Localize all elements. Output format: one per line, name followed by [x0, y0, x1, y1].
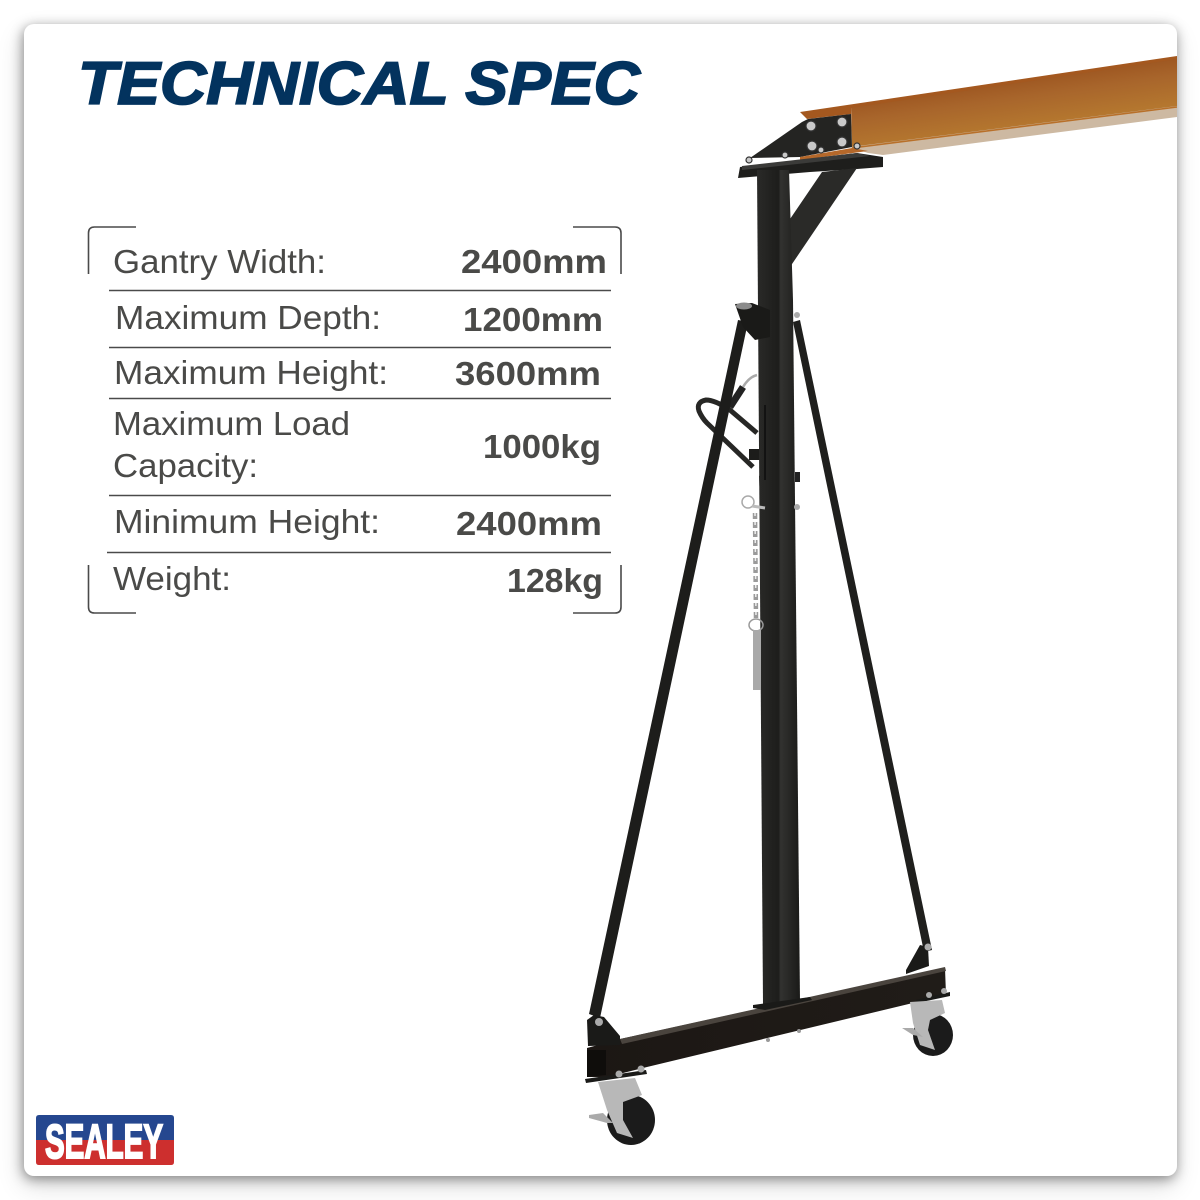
row: maximum height: [114, 354, 601, 392]
left leg with pivot bracket: [589, 302, 800, 1018]
row: weight: Weight:: [113, 560, 231, 597]
row: maximum load capacity: Capacity:: [113, 447, 258, 484]
row: maximum height: Maximum Height:: [114, 354, 388, 391]
logo red band: [36, 1140, 174, 1165]
row: gantry width: 2400mm: [461, 243, 607, 280]
left caster: [585, 1066, 655, 1145]
row: maximum height: 3600mm: [455, 355, 601, 392]
row: maximum depth: 1200mm: [463, 301, 603, 338]
main column: [757, 170, 800, 1004]
row: minimum height: [114, 503, 602, 542]
row: maximum load capacity: Maximum Load: [113, 405, 350, 442]
lock pin and chain: [742, 496, 765, 690]
handle and hydraulic lever: [696, 374, 760, 486]
mounting plate: [738, 114, 883, 178]
row: weight: 128kg: [507, 562, 603, 599]
title: TECHNICAL SPEC: [78, 50, 642, 117]
row: maximum load capacity: [113, 405, 601, 484]
row: minimum height: Minimum Height:: [114, 503, 380, 540]
column slot: [764, 405, 766, 480]
row: gantry width: [113, 243, 607, 280]
diagonal brace: [790, 168, 856, 264]
logo blue band: [36, 1115, 174, 1140]
base gussets: [587, 944, 932, 1046]
i-beam: [800, 56, 1177, 155]
base beam: [587, 967, 946, 1077]
row: minimum height: 2400mm: [456, 505, 602, 542]
row: maximum depth: Maximum Depth:: [115, 299, 381, 336]
logo wordmark: SEALEY: [45, 1116, 163, 1169]
right leg: [793, 320, 932, 952]
gantry crane illustration: [585, 56, 1177, 1145]
specification table: [88, 227, 621, 613]
row: gantry width: Gantry Width:: [113, 243, 326, 280]
row: weight: [113, 560, 603, 599]
row: maximum depth: [115, 299, 603, 338]
sealey logo: [36, 1115, 174, 1169]
row dividers: [107, 290, 611, 552]
right caster: [902, 988, 953, 1056]
row: maximum load capacity: 1000kg: [483, 428, 601, 465]
table corner brackets: [88, 227, 621, 613]
